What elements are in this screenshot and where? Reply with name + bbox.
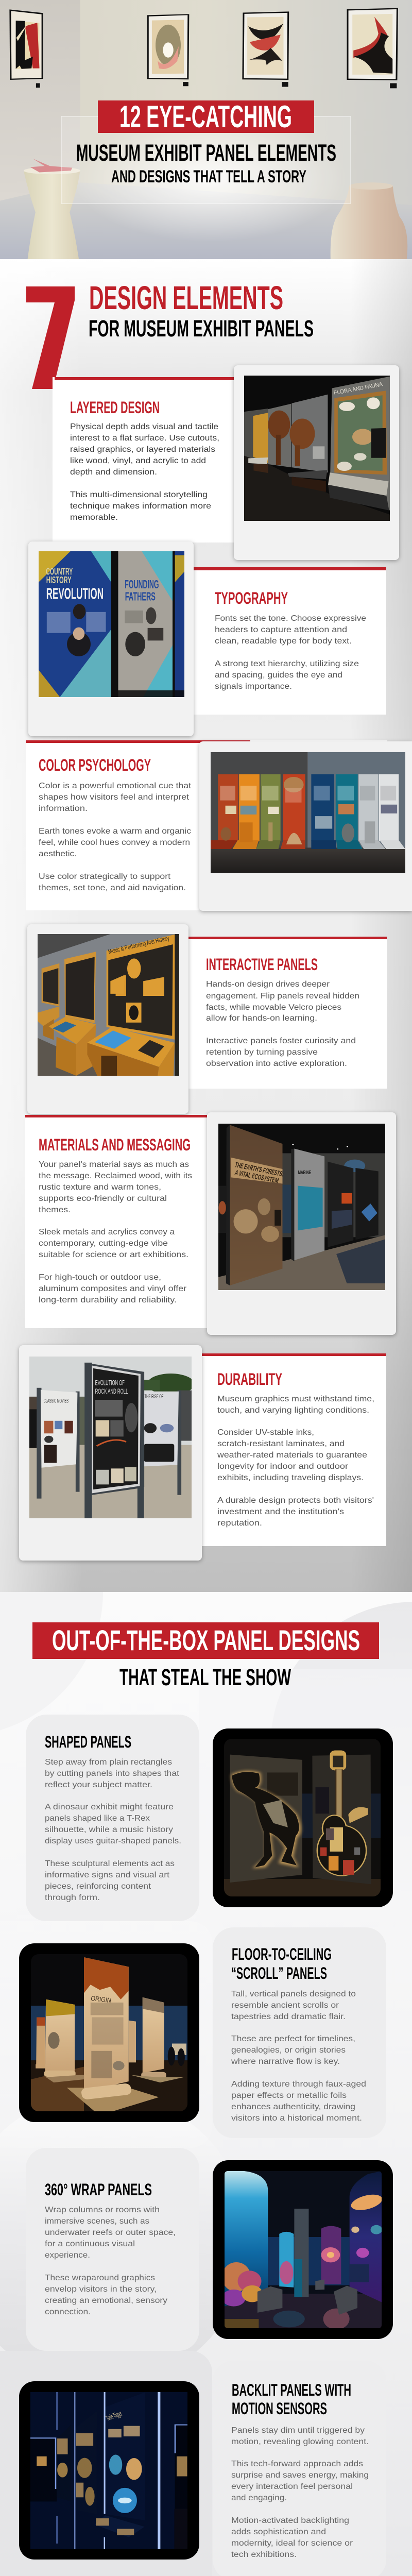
panel: layered design: technique makes information more [70, 502, 211, 511]
panel: shaped panels: These sculptural elements act as [45, 1859, 175, 1868]
panel: color psychology: COLOR PSYCHOLOGY [39, 756, 151, 774]
panel: layered design: interest to a flat surface. Use cutouts, [70, 434, 219, 443]
panel: materials and messaging: aluminum composites and vinyl offer [39, 1284, 187, 1293]
panel: materials and messaging: For high-touch or outdoor use, [39, 1273, 161, 1282]
panel: interactive panels: Hands-on design drives deeper [206, 980, 330, 989]
panel: color psychology: feel, while cool hues convey a modern [39, 838, 190, 847]
panel: floor-to-ceiling scroll panels: “SCROLL” PANELS [231, 1964, 327, 1982]
panel: layered design: Physical depth adds visual and tactile [70, 422, 218, 431]
photo card: layered design exhibit [234, 365, 399, 560]
panel: layered design: This multi-dimensional storytelling [70, 490, 208, 499]
photo card: outdoor durable displays: ROCK AND ROLL [95, 1387, 128, 1395]
panel: floor-to-ceiling scroll panels: paper effects or metallic foils [231, 2091, 347, 2100]
panel: 360 wrap panels: 360° WRAP PANELS [45, 2180, 152, 2199]
panel: floor-to-ceiling scroll panels [213, 1927, 386, 2138]
panel: shaped panels: by cutting panels into shapes that [45, 1769, 180, 1778]
section heading: 7 design elements [89, 279, 314, 342]
image: scroll panels: ORIGIN [90, 1995, 112, 2005]
panel: color psychology [26, 740, 387, 910]
panel: interactive panels: Interactive panels foster curiosity and [206, 1037, 356, 1045]
panel: materials and messaging: MATERIALS AND MESSAGING [39, 1136, 191, 1154]
panel: 360 wrap panels: for a continuous visual [45, 2240, 135, 2248]
panel: typography: A strong text hierarchy, utilizing size [215, 659, 359, 668]
panel: interactive panels [185, 937, 387, 1089]
section heading: 7 design elements: DESIGN ELEMENTS [89, 279, 283, 316]
panel: shaped panels: SHAPED PANELS [45, 1733, 131, 1751]
panel: floor-to-ceiling scroll panels: genealogies, or origin stories [231, 2046, 346, 2055]
panel: materials and messaging: the message. Reclaimed wood, with its [39, 1172, 192, 1180]
heading: out-of-the-box panel designs [32, 1622, 379, 1690]
panel: interactive panels: facts, while movable Velcro pieces [206, 1003, 341, 1012]
panel: durability: reputation. [217, 1519, 262, 1528]
photo card: outdoor durable displays [19, 1345, 202, 1561]
panel: backlit panels with motion sensors: adds sophistication and [231, 2528, 326, 2536]
panel: layered design: depth and dimension. [70, 468, 157, 477]
photo card: color psychology exhibit [199, 741, 412, 911]
panel: color psychology: information. [39, 804, 88, 813]
photo card: typography exhibit [28, 541, 194, 736]
panel: interactive panels: observation into active exploration. [206, 1059, 347, 1068]
photo card: typography exhibit: REVOLUTION [46, 585, 104, 603]
panel: durability: weather-rated materials to guarantee [217, 1451, 367, 1460]
panel: layered design: raised graphics, or layered materials [70, 445, 215, 454]
background: out-of-the-box and how-to sections with soft circles [0, 1592, 412, 2576]
image: 360 wrap columns [213, 2160, 393, 2339]
panel: shaped panels: silhouette, while a music history [45, 1825, 173, 1834]
panel: materials and messaging: contemporary, cutting-edge vibe [39, 1239, 168, 1248]
panel: materials and messaging: rustic texture and warm tones, [39, 1183, 161, 1192]
panel: durability: Consider UV-stable inks, [217, 1428, 314, 1437]
panel: shaped panels: pieces, reinforcing content [45, 1882, 151, 1891]
panel: floor-to-ceiling scroll panels: resemble ancient scrolls or [231, 2001, 339, 2010]
panel: backlit panels with motion sensors: motion, revealing glowing content. [231, 2437, 369, 2446]
panel: materials and messaging: supports eco-friendly or cultural [39, 1194, 167, 1203]
big number 7 [26, 286, 75, 389]
panel: typography: headers to capture attention and [215, 625, 347, 634]
panel: backlit panels with motion sensors: Panels stay dim until triggered by [231, 2426, 365, 2435]
panel: layered design [53, 377, 242, 543]
panel: interactive panels: INTERACTIVE PANELS [206, 955, 318, 974]
panel: durability: investment and the institution's [217, 1507, 344, 1516]
panel: durability: longevity for indoor and outdoor [217, 1462, 349, 1471]
photo card: materials exhibit: A VITAL ECOSYSTEM [234, 1169, 280, 1185]
panel: 360 wrap panels: Wrap columns or rooms with [45, 2206, 160, 2214]
panel: typography: clean, readable type for body text. [215, 637, 352, 646]
heading: out-of-the-box panel designs: THAT STEAL THE SHOW [119, 1664, 291, 1690]
panel: durability: touch, and varying lighting conditions. [217, 1406, 369, 1415]
panel: 360 wrap panels [26, 2148, 199, 2351]
panel: materials and messaging: themes. [39, 1206, 71, 1214]
panel: color psychology: Color is a powerful emotional cue that [39, 782, 192, 790]
panel: durability: DURABILITY [217, 1370, 282, 1388]
panel: color psychology: aesthetic. [39, 850, 77, 858]
panel: materials and messaging [25, 1115, 211, 1328]
photo card: typography exhibit: HISTORY [46, 575, 72, 585]
panel: typography: Fonts set the tone. Choose expressive [215, 614, 366, 623]
panel: 360 wrap panels: creating an emotional, sensory [45, 2296, 167, 2305]
title block: glass panel with headline [61, 99, 351, 204]
panel: backlit panels with motion sensors: every interaction feel personal [231, 2482, 353, 2491]
panel: interactive panels: allow for hands-on learning. [206, 1014, 317, 1023]
photo card: typography exhibit: COUNTRY [46, 567, 73, 577]
panel: floor-to-ceiling scroll panels: Tall, vertical panels designed to [231, 1990, 356, 1998]
panel: typography [191, 567, 386, 715]
panel: backlit panels with motion sensors: Motion-activated backlighting [231, 2516, 349, 2525]
panel: typography: TYPOGRAPHY [215, 589, 288, 607]
panel: materials and messaging: Sleek metals and acrylics convey a [39, 1228, 175, 1236]
background: design elements section [0, 259, 412, 1592]
panel: backlit panels with motion sensors: This tech-forward approach adds [231, 2460, 363, 2468]
image: backlit motion panels: Tonle Trigger [105, 2410, 124, 2422]
panel: floor-to-ceiling scroll panels: FLOOR-TO-CEILING [232, 1945, 332, 1963]
panel: shaped panels: panels shaped like a T-Rex [45, 1814, 150, 1823]
panel: shaped panels: Step away from plain rectangles [45, 1758, 172, 1767]
panel: shaped panels: reflect your subject matter. [45, 1781, 152, 1789]
panel: color psychology: Use color strategically to support [39, 872, 171, 881]
panel: durability [199, 1353, 386, 1546]
panel: floor-to-ceiling scroll panels: visitors into a historical moment. [231, 2114, 362, 2123]
panel: backlit panels with motion sensors [213, 2361, 386, 2576]
panel: materials and messaging: long-term durability and reliability. [39, 1296, 177, 1304]
panel: durability: A durable design protects both visitors' [217, 1496, 374, 1505]
panel: backlit panels with motion sensors: MOTION SENSORS [232, 2399, 327, 2418]
panel: durability: scratch-resistant laminates, and [217, 1439, 345, 1448]
panel: 360 wrap panels: These wraparound graphics [45, 2274, 155, 2282]
photo card: outdoor durable displays: EVOLUTION OF [95, 1379, 125, 1387]
title block: glass panel with headline: AND DESIGNS THAT TELL A STORY [111, 167, 306, 187]
image: shaped T-Rex and guitar panels [213, 1728, 393, 1907]
panel: color psychology: themes, set tone, and aid navigation. [39, 884, 186, 892]
panel: 360 wrap panels: underwater reefs or outer space, [45, 2228, 176, 2237]
panel: layered design: memorable. [70, 513, 118, 522]
photo card: outdoor durable displays: CLASSIC MOVIES [44, 1398, 68, 1404]
panel: durability: Museum graphics must withstand time, [217, 1395, 374, 1403]
panel: floor-to-ceiling scroll panels: where narrative flow is key. [231, 2057, 340, 2066]
panel: materials and messaging: suitable for science or art exhibitions. [39, 1250, 188, 1259]
panel: layered design: LAYERED DESIGN [70, 398, 160, 417]
panel: backlit panels with motion sensors: tech exhibitions. [231, 2550, 297, 2559]
panel: 360 wrap panels: envelop visitors in the story, [45, 2285, 157, 2294]
panel: floor-to-ceiling scroll panels: tapestries add dramatic flair. [231, 2012, 346, 2021]
panel: shaped panels [26, 1715, 199, 1921]
panel: durability: exhibits, including traveling displays. [217, 1473, 364, 1482]
panel: shaped panels: display uses guitar-shaped panels. [45, 1837, 181, 1845]
panel: color psychology: Earth tones evoke a warm and organic [39, 827, 191, 836]
panel: typography: and spacing, guides the eye and [215, 671, 342, 680]
panel: shaped panels: through form. [45, 1893, 100, 1902]
panel: materials and messaging: Your panel's material says as much as [39, 1160, 189, 1169]
panel: color psychology: shapes how visitors feel and interpret [39, 793, 190, 802]
panel: 360 wrap panels: connection. [45, 2308, 91, 2316]
panel: shaped panels: A dinosaur exhibit might feature [45, 1803, 174, 1811]
panel: backlit panels with motion sensors: and engaging. [231, 2494, 287, 2502]
photo card: materials exhibit: MARINE [298, 1170, 311, 1176]
title block: glass panel with headline: 12 EYE-CATCHING [119, 99, 292, 134]
photo card: outdoor durable displays: THE RISE OF [145, 1393, 163, 1400]
panel: interactive panels: retention by turning passive [206, 1048, 318, 1057]
panel: typography: signals importance. [215, 682, 292, 691]
panel: interactive panels: engagement. Flip panels reveal hidden [206, 992, 359, 1001]
photo card: materials exhibit [207, 1112, 396, 1335]
photo card: materials exhibit: THE EARTH'S FORESTS: [234, 1161, 285, 1178]
panel: backlit panels with motion sensors: surprise and saves energy, making [231, 2471, 369, 2480]
panel: floor-to-ceiling scroll panels: Adding texture through faux-aged [231, 2080, 366, 2089]
image: scroll panels [19, 1943, 199, 2122]
panel: shaped panels: informative signs and visual art [45, 1871, 170, 1879]
panel: layered design: like wood, vinyl, and acrylic to add [70, 456, 206, 465]
photo card: interactive exhibit [27, 924, 188, 1114]
panel: 360 wrap panels: immersive scenes, such as [45, 2217, 149, 2226]
panel: 360 wrap panels: experience. [45, 2251, 90, 2260]
panel: floor-to-ceiling scroll panels: These are perfect for timelines, [231, 2035, 355, 2043]
panel: floor-to-ceiling scroll panels: enhances authenticity, drawing [231, 2103, 355, 2111]
image: backlit motion panels [19, 2381, 199, 2560]
panel: backlit panels with motion sensors: modernity, ideal for science or [231, 2539, 353, 2548]
hero photo: gallery room with framed art and pedestals [0, 0, 412, 259]
